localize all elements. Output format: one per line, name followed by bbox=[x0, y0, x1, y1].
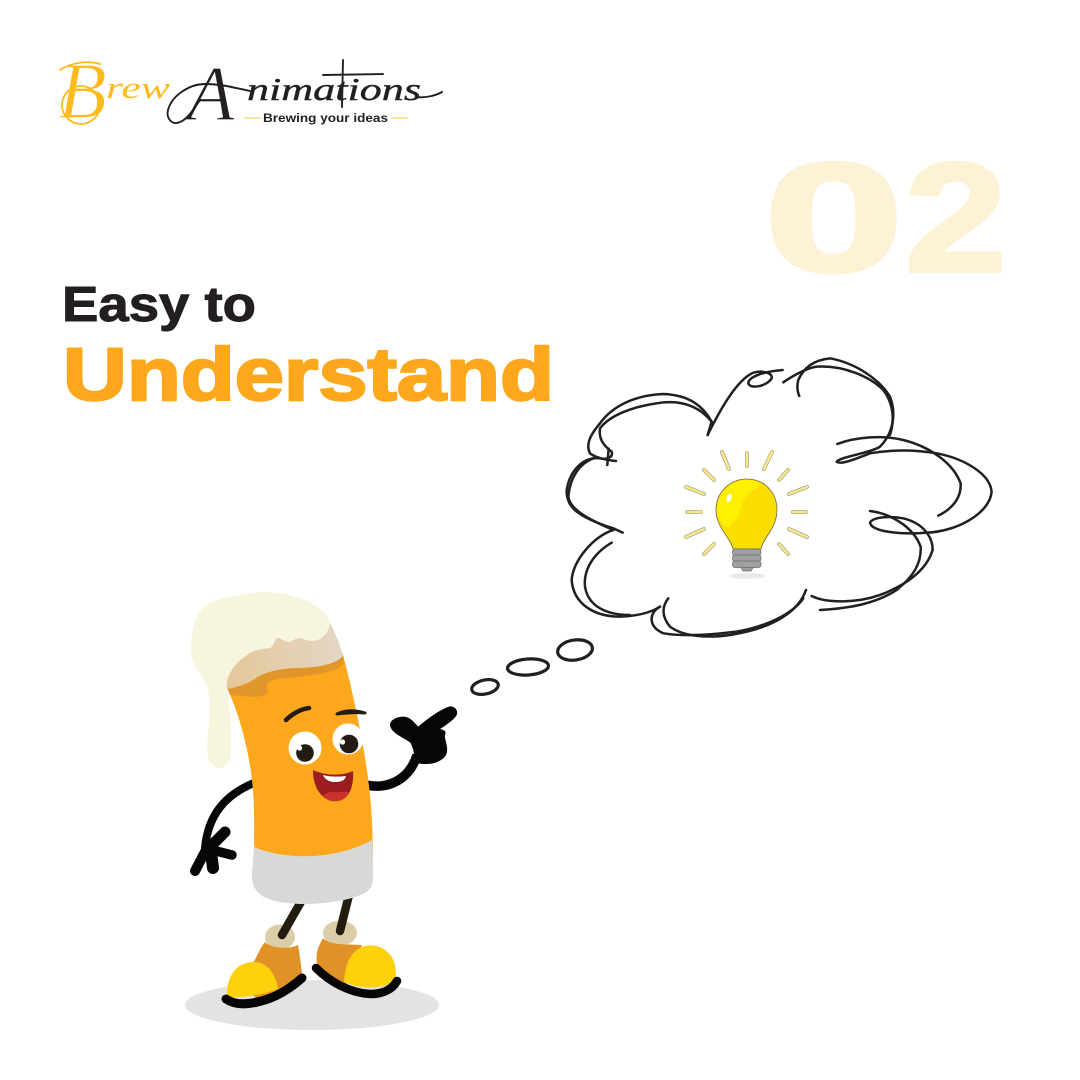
left arm and hand bbox=[195, 783, 254, 871]
bulb rays bbox=[686, 452, 807, 554]
foam top and drip bbox=[191, 592, 330, 768]
foam shadow band bbox=[227, 655, 344, 697]
bulb glass bbox=[716, 479, 777, 549]
legs and socks bbox=[265, 895, 357, 950]
ground shadow bbox=[185, 980, 439, 1030]
logo word: Animations: A bbox=[182, 50, 235, 137]
large step number bbox=[764, 131, 1007, 304]
right shoe bbox=[316, 938, 397, 994]
glass base bbox=[252, 840, 373, 904]
thought cloud outline bbox=[567, 358, 992, 637]
large step number: 0 bbox=[764, 131, 904, 304]
left shoe bbox=[226, 942, 303, 1004]
logo word: Animations: nimations bbox=[247, 71, 421, 107]
mouth bbox=[313, 770, 353, 801]
logo word: Brew bbox=[58, 48, 170, 136]
icon: light bulb bbox=[686, 452, 807, 579]
large step number: 2 bbox=[905, 131, 1007, 304]
right arm bbox=[366, 755, 417, 786]
logo: Brew Animations bbox=[58, 48, 442, 137]
bulb shadow bbox=[728, 573, 766, 579]
logo tagline: Brewing your ideas bbox=[263, 111, 388, 125]
character: beer glass mascot bbox=[185, 592, 456, 1030]
foam lower layer bbox=[215, 623, 343, 689]
bulb inner glow bbox=[717, 480, 761, 527]
right eyebrow bbox=[337, 711, 365, 714]
face bbox=[286, 708, 365, 801]
heading: Easy to: Easy to bbox=[62, 278, 256, 332]
logo word: Animations bbox=[168, 50, 442, 137]
right eye bbox=[332, 724, 364, 754]
left eyebrow bbox=[286, 708, 309, 720]
logo word: Brew: rew bbox=[106, 70, 170, 105]
thought bubbles bbox=[470, 638, 594, 697]
bulb highlight bbox=[725, 493, 733, 503]
beer glass body bbox=[228, 655, 373, 870]
left eye bbox=[288, 732, 322, 764]
bulb screw base bbox=[732, 549, 761, 571]
heading: Understand: Understand bbox=[63, 333, 554, 416]
pointing hand bbox=[391, 707, 456, 763]
logo word: Brew: B bbox=[58, 48, 107, 136]
